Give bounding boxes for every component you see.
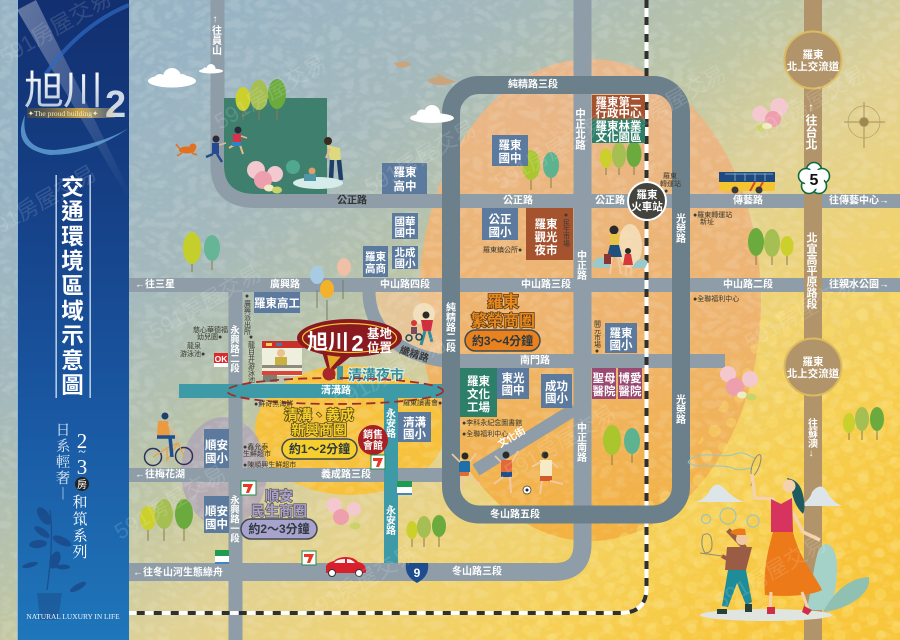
tree group: Chuanyi road: [748, 228, 794, 265]
label: Yongxing section 2: 永興路二段: [228, 324, 240, 373]
block: Shun-an Elementary: 國小: [205, 452, 228, 465]
label: Chunjing section 3: 純精路三段: [508, 78, 558, 90]
label: Dongshan section 5: 冬山路五段: [490, 508, 540, 520]
bubbles: [702, 508, 759, 527]
zone label: Shun-an Minsheng: 順安: [265, 488, 293, 504]
block: Luodong Cultural Workshop: 工場: [467, 400, 490, 414]
label: Gongzheng east: 公正路: [595, 194, 625, 206]
tree group: Yong-an road: [406, 515, 446, 547]
road: Qinggou (teal): [179, 384, 445, 398]
poi: Xinyuntai market: ●鑫允泰: [243, 442, 268, 451]
title rule left: [56, 175, 57, 398]
label: to Chuanyi center: 往傳藝中心→: [829, 194, 889, 206]
block: Luodong Elementary: 國小: [610, 339, 633, 352]
dotted pattern: lower right: [470, 260, 900, 640]
Site speech bubble: [297, 319, 402, 380]
block: St Mary hospital: 醫院: [592, 384, 616, 398]
watermarks: 591房屋交易: [300, 540, 421, 624]
block: Forestry Culture Park: [592, 119, 645, 144]
block: Gongzheng Elementary: [482, 208, 518, 240]
block: Luodong Junior High: [492, 135, 528, 166]
boy: [717, 528, 752, 614]
block: Second Administrative Center: [592, 95, 645, 120]
block: Luodong Senior High: 羅東: [394, 165, 417, 179]
block: Forestry Culture Park: 羅東林業: [596, 119, 642, 133]
commercial zones: [241, 292, 540, 539]
block: Luodong Night Market: 觀光: [534, 230, 558, 244]
bus: [719, 172, 775, 194]
icon: 7-Eleven Yong-an: [371, 455, 385, 469]
road: Nanmen: [455, 354, 725, 368]
block: Beicheng Elementary: 北成: [394, 246, 416, 259]
cloud: ring road: [410, 105, 454, 123]
zone label: Shun-an Minsheng: 民生商圈: [251, 503, 307, 519]
block: Chenggong Elementary: 成功: [545, 379, 568, 393]
sidebar edge highlight: [17, 0, 18, 640]
bubble woman and child scene: [688, 453, 869, 621]
Luodong train station: 羅東: [636, 188, 658, 201]
child and play blanket in park: [286, 160, 343, 189]
tagline right column: [70, 429, 90, 560]
zone label: Luodong downtown: 羅東: [487, 292, 519, 311]
road: inner ring: [451, 85, 681, 514]
road: Dongshan section 3 and Zhongzheng: [129, 0, 582, 572]
poi: Longmujing pool: ●龍目井游泳池: [248, 334, 255, 383]
poi: Li Keyong library: ●李科永紀念圖書館: [462, 418, 522, 427]
poi: seafood: ●鮮奇黑海鮮: [254, 399, 293, 408]
label: curved Chunjing road: 纖精路: [398, 343, 431, 365]
zone label: Shun-an Minsheng: 約2～3分鐘: [248, 521, 310, 536]
street stall: Qinggou night market: [262, 341, 304, 382]
block: St Mary hospital: [592, 368, 616, 399]
zone label: Shun-an Minsheng: [241, 488, 317, 539]
label: Zhongshan section 3: 中山路三段: [521, 278, 571, 290]
label: Zhongzheng north: 中正北路: [574, 107, 586, 151]
block: Poai hospital: [618, 368, 642, 399]
zone: Shun-an purple halo: [181, 417, 267, 527]
block: Dongguang Junior High: 國中: [502, 383, 524, 397]
Interchange north: 羅東: [802, 48, 824, 61]
label: Yongxing section 1: 永興路一段: [228, 494, 240, 543]
Dashed oval around night market street: [227, 378, 443, 404]
label: Zhongshan section 2: 中山路二段: [723, 278, 773, 290]
label: Zhongshan section 4: 中山路四段: [380, 278, 430, 290]
block: Luodong Senior High: [382, 163, 427, 194]
road: Yicheng and Meihua Lake: [129, 468, 455, 482]
trees: [140, 79, 884, 547]
icon: FamilyMart Yong-an: [397, 481, 412, 495]
dog: [176, 144, 197, 156]
tree group: Luodong junior high: [522, 150, 559, 190]
Site marker: Qinggou night market label: 清溝夜市: [348, 367, 404, 383]
bubble wand: [749, 453, 763, 486]
block: Guohua Junior High: [392, 213, 418, 239]
mother and child with scooter: [406, 303, 435, 345]
block: Shun-an Elementary: [204, 429, 229, 468]
soccer ball: [523, 486, 531, 494]
poi: New transfer station: 新址: [700, 217, 714, 226]
title rule right: [90, 175, 91, 398]
watermarks: 591房屋交易: [710, 530, 831, 614]
light rays: [17, 0, 129, 200]
clouds: [148, 64, 454, 123]
poi: Longquan pool: 龍泉: [187, 341, 201, 350]
Route 9 shield: 9: [414, 566, 421, 580]
watermarks: 591房屋交易: [740, 270, 861, 354]
block: Beicheng Elementary: 國小: [394, 257, 416, 270]
balloons: [310, 258, 351, 320]
block: Luodong Cultural Workshop: [460, 368, 497, 417]
leaf silhouette: [22, 505, 87, 620]
player: kicking boy: [532, 452, 563, 494]
label: Beiyi plain section: 北宜高平原路段: [805, 232, 818, 310]
watermarks: 591房屋交易: [490, 110, 611, 194]
poi: Xinyuntai market: 生鮮超市: [243, 449, 271, 458]
label: Dongshan section 3: 冬山路三段: [452, 564, 502, 578]
railway: [129, 0, 646, 613]
label: Zhongzheng road: 中正路: [574, 249, 586, 281]
compass: [844, 102, 885, 148]
zone label: Qinggou Yicheng: 約1～2分鐘: [289, 441, 350, 456]
block: Guohua Junior High: 國中: [394, 226, 416, 239]
runner in blue: [206, 136, 226, 162]
tree group: east of freeway: [843, 407, 884, 440]
tagline right column: 房: [77, 478, 87, 491]
poi: PX Mart inner: ●全聯福利中心: [462, 429, 508, 438]
watermarks: 591房屋交易: [330, 330, 451, 414]
poi: Chen Shunxing market: ●陳順興生鮮超市: [243, 460, 296, 469]
block: Luodong Vocational High: 羅東高工: [254, 296, 300, 310]
logo: 旭川: [24, 69, 102, 113]
zone label: Qinggou Yicheng: 新興商圈: [291, 422, 347, 438]
label: Wenhua street: 文化街: [495, 424, 528, 450]
tagline right column: 2: [77, 429, 87, 453]
label: to Dongshan River park: ←往冬山河生態綠舟: [133, 566, 223, 578]
label: to Suao: 往蘇澳↓: [806, 417, 818, 459]
Interchange north: 北上交流道: [787, 60, 840, 73]
block: Qinggou Elementary: 國小: [403, 428, 426, 441]
block: St Mary hospital: 聖母: [592, 372, 616, 385]
Site speech bubble: 2: [351, 331, 364, 356]
road: Wenhua street: [476, 409, 575, 470]
Teal post beside label: [337, 366, 343, 380]
poi: Xinyuntai market: [243, 442, 271, 458]
block: Poai hospital: 醫院: [618, 384, 642, 398]
zone label: Luodong downtown: 約3～4分鐘: [472, 333, 533, 348]
poi: PX Mart east: ●全聯福利中心: [693, 294, 739, 303]
poi: Waldorf kindergarten: 幼兒園●: [197, 332, 222, 341]
tree group: Zhongzheng south: [603, 425, 640, 465]
road: Yong-an (teal): [384, 398, 398, 563]
label: Chuanyi road: 傳藝路: [733, 194, 763, 206]
green park: [224, 98, 327, 194]
tagline right column: 3: [77, 455, 87, 479]
block: Luodong Night Market: [526, 208, 573, 260]
label: Zhongzheng south: 中正南路: [574, 421, 586, 463]
label: Guangrong north: 光榮路: [674, 212, 686, 244]
cherry blossom: Shun-an south: [326, 498, 361, 530]
block: Luodong Night Market: 夜市: [534, 243, 558, 257]
orange district zone: [419, 59, 761, 541]
road: curved branch to Chunjing: [369, 292, 445, 361]
pale clouds: [695, 484, 842, 506]
block: Beicheng Elementary: [392, 246, 418, 270]
zone label: Qinggou Yicheng: [282, 407, 357, 459]
poi: New transfer station: ●羅東轉運站: [693, 210, 732, 219]
tagline right column: 和筑系列: [70, 494, 90, 560]
cloud: large west: [148, 68, 196, 88]
peach zone near Zhongshan road: [375, 292, 442, 360]
label: to Qinshui Park: 往親水公園→: [829, 278, 889, 290]
block: Chenggong Elementary: [541, 374, 572, 408]
tree group: forestry park: [600, 141, 642, 175]
kids playing soccer: [452, 451, 563, 494]
road: Gongzheng and Yuanshan: [218, 0, 900, 201]
Interchange north: [784, 32, 842, 88]
leafy bush: [807, 544, 869, 612]
block: Second Administrative Center: 行政中心: [596, 106, 642, 120]
watermarks: 591房屋交易: [750, 60, 871, 144]
birds: [394, 61, 456, 85]
block: Gongzheng Elementary: 公正: [488, 212, 512, 226]
watermarks: 591房屋交易: [500, 400, 621, 484]
poi: Bus transfer station: 羅東: [663, 171, 677, 180]
sales office badge: 會館: [363, 439, 383, 452]
poi: Township Office: 羅東鎮公所●: [483, 245, 522, 254]
player: boy in orange: [494, 451, 518, 493]
watermarks: 591房屋交易: [110, 460, 231, 544]
runner in red: [229, 126, 247, 154]
block: Luodong Elementary: 羅東: [610, 326, 633, 340]
label: Gongzheng inner: 公正路: [503, 194, 533, 206]
player: girl in blue: [452, 452, 480, 490]
cherry blossom: park: [247, 161, 283, 194]
poi: Minsheng market: ●民生市場: [562, 212, 570, 248]
label: Gongzheng west: 公正路: [337, 194, 367, 206]
road: Zhongshan: [129, 278, 900, 292]
sidebar panel: [17, 0, 129, 640]
poi: Waldorf kindergarten: [193, 325, 228, 341]
block: Luodong Junior High: 國中: [498, 151, 522, 165]
school blocks: [204, 95, 645, 533]
tree group: park: [236, 79, 286, 120]
block: Second Administrative Center: 羅東第二: [596, 95, 642, 109]
cherry blossom: north: [752, 98, 788, 132]
brand slogan: NATURAL LUXURY IN LIFE: [26, 612, 120, 621]
sales office badge: 銷售: [363, 428, 383, 441]
label: to Sanxing: ←往三星: [135, 278, 175, 290]
poi: Kaiyuan market: 開元市場●: [594, 320, 601, 355]
block: Shun-an Junior High: 順安: [205, 504, 228, 518]
highway: Beiyi freeway: [804, 0, 822, 640]
block: Shun-an Junior High: [204, 496, 229, 533]
icon: OK Mart: [214, 353, 228, 367]
block: Luodong Vocational High: [254, 292, 300, 313]
block: Dongguang Junior High: [497, 368, 529, 399]
Highway 5 shield: 5: [810, 172, 819, 189]
block: Guohua Junior High: 國華: [394, 215, 416, 228]
tree group: west of Guanghsing road: [183, 232, 220, 272]
Site speech bubble: 基地: [367, 326, 392, 341]
Interchange south: 羅東: [802, 355, 824, 368]
zone label: Luodong downtown: [465, 292, 540, 351]
block: Shun-an Junior High: 國中: [205, 517, 228, 531]
label: to Yuanshan: ↑往員山: [210, 14, 222, 56]
block: Poai hospital: 博愛: [618, 371, 642, 385]
Highway 5 shield: [798, 162, 830, 194]
watermarks: 591房屋交易: [145, 260, 266, 344]
block: Luodong Cultural Workshop: 文化: [467, 387, 490, 401]
Site speech bubble: 旭川: [307, 331, 349, 354]
label: Nanmen road: 南門路: [520, 354, 550, 366]
convenience stores: [214, 353, 412, 565]
mother and child shopping: [592, 224, 648, 275]
poi: Bus transfer station: ●: [664, 188, 668, 195]
block: Dongguang Junior High: 東光: [502, 371, 525, 385]
road labels: [133, 14, 889, 578]
tagline left column: 日系輕奢—: [52, 422, 74, 502]
cherry blossom: Nanmen east: [720, 366, 758, 400]
watermarks: 591房屋交易: [210, 50, 331, 134]
poi: Reading society: 羅東讀書會●: [403, 398, 442, 407]
block: Gongzheng Elementary: 國小: [488, 226, 512, 239]
label: to Meihua Lake: ←往梅花湖: [135, 468, 185, 480]
car: [326, 557, 366, 576]
cyclist: [144, 412, 192, 466]
block: Chenggong Elementary: 國小: [545, 392, 568, 405]
poi: Longquan pool: [180, 341, 205, 358]
road: Yongxing: [228, 292, 242, 640]
Site speech bubble: 位置: [367, 340, 392, 355]
block: Shun-an Elementary: 順安: [205, 438, 228, 452]
poi: Longquan pool: 游泳池●: [180, 349, 205, 358]
label: Guangrong south: 光榮路: [674, 393, 686, 425]
zone label: Qinggou Yicheng: 清溝、義成: [284, 407, 354, 423]
Luodong train station: [628, 182, 666, 220]
logo: 2: [105, 84, 126, 126]
tree group: Shun-an: [140, 499, 193, 541]
icon: OK Mart: OK: [215, 354, 228, 364]
label: Yong-an north: 永安路: [384, 407, 396, 439]
Interchange south: 北上交流道: [787, 367, 840, 380]
Route 9 shield: [406, 563, 428, 583]
boy's wand: [700, 534, 722, 556]
block: Luodong Commercial High: 高商: [365, 262, 386, 275]
sales office badge: [358, 425, 388, 455]
yellow zone: Qinggou and Yicheng: [255, 365, 445, 495]
logo: [24, 69, 126, 126]
logo: ✦The proud building✦: [28, 109, 99, 118]
block: Luodong Night Market: 羅東: [534, 217, 558, 231]
label: Guangxing road: 廣興路: [270, 278, 300, 290]
watermarks: 591房屋交易: [360, 115, 481, 199]
label: Qinggou road: 清溝路: [321, 384, 351, 396]
poi: Waldorf kindergarten: 慈心華德福: [193, 325, 228, 334]
label: Yong-an south: 永安路: [384, 504, 396, 536]
block: Qinggou Elementary: 清溝: [403, 415, 426, 429]
block: Luodong Senior High: 高中: [394, 179, 416, 193]
label: Chunjing section 2: 純精路二段: [444, 301, 456, 353]
ground shadow: [700, 609, 832, 621]
arc swoosh: [45, 5, 129, 75]
Luodong train station: 火車站: [631, 200, 663, 213]
block: Luodong Cultural Workshop: 羅東: [467, 374, 490, 388]
Interchange south: [784, 338, 842, 396]
watermarks: 591房屋交易: [610, 60, 731, 144]
light swoosh: [21, 115, 129, 155]
bubble trail: [688, 453, 756, 470]
poi: Bus transfer station: [660, 171, 681, 195]
poi: Guangxing police: ●廣興派出所: [244, 293, 251, 336]
block: Luodong Commercial High: [363, 246, 388, 277]
poi: New transfer station: [693, 210, 732, 226]
label: to Taipei: ↑往台北: [804, 100, 818, 150]
icon: FamilyMart west: [215, 550, 229, 564]
title: 交通環境區域示意圖: [58, 174, 84, 398]
block: Forestry Culture Park: 文化園區: [596, 130, 642, 144]
block: Luodong Elementary: [605, 323, 637, 353]
points of interest: [180, 171, 739, 469]
icon: 7-Eleven west: [241, 481, 256, 495]
block: Luodong Junior High: 羅東: [498, 138, 522, 152]
block: Qinggou Elementary: [398, 412, 431, 442]
icon: 7-Eleven south: [302, 551, 316, 565]
tagline right column: ~: [78, 445, 86, 460]
block: Luodong Commercial High: 羅東: [365, 250, 386, 263]
parent in park: [324, 137, 341, 180]
cloud: small west: [199, 64, 223, 74]
poi: Bus transfer station: 轉運站: [660, 179, 681, 188]
label: Yicheng section 3: 義成路三段: [321, 468, 371, 480]
woman: [752, 474, 822, 615]
zone label: Luodong downtown: 繁榮商圈: [471, 311, 535, 330]
